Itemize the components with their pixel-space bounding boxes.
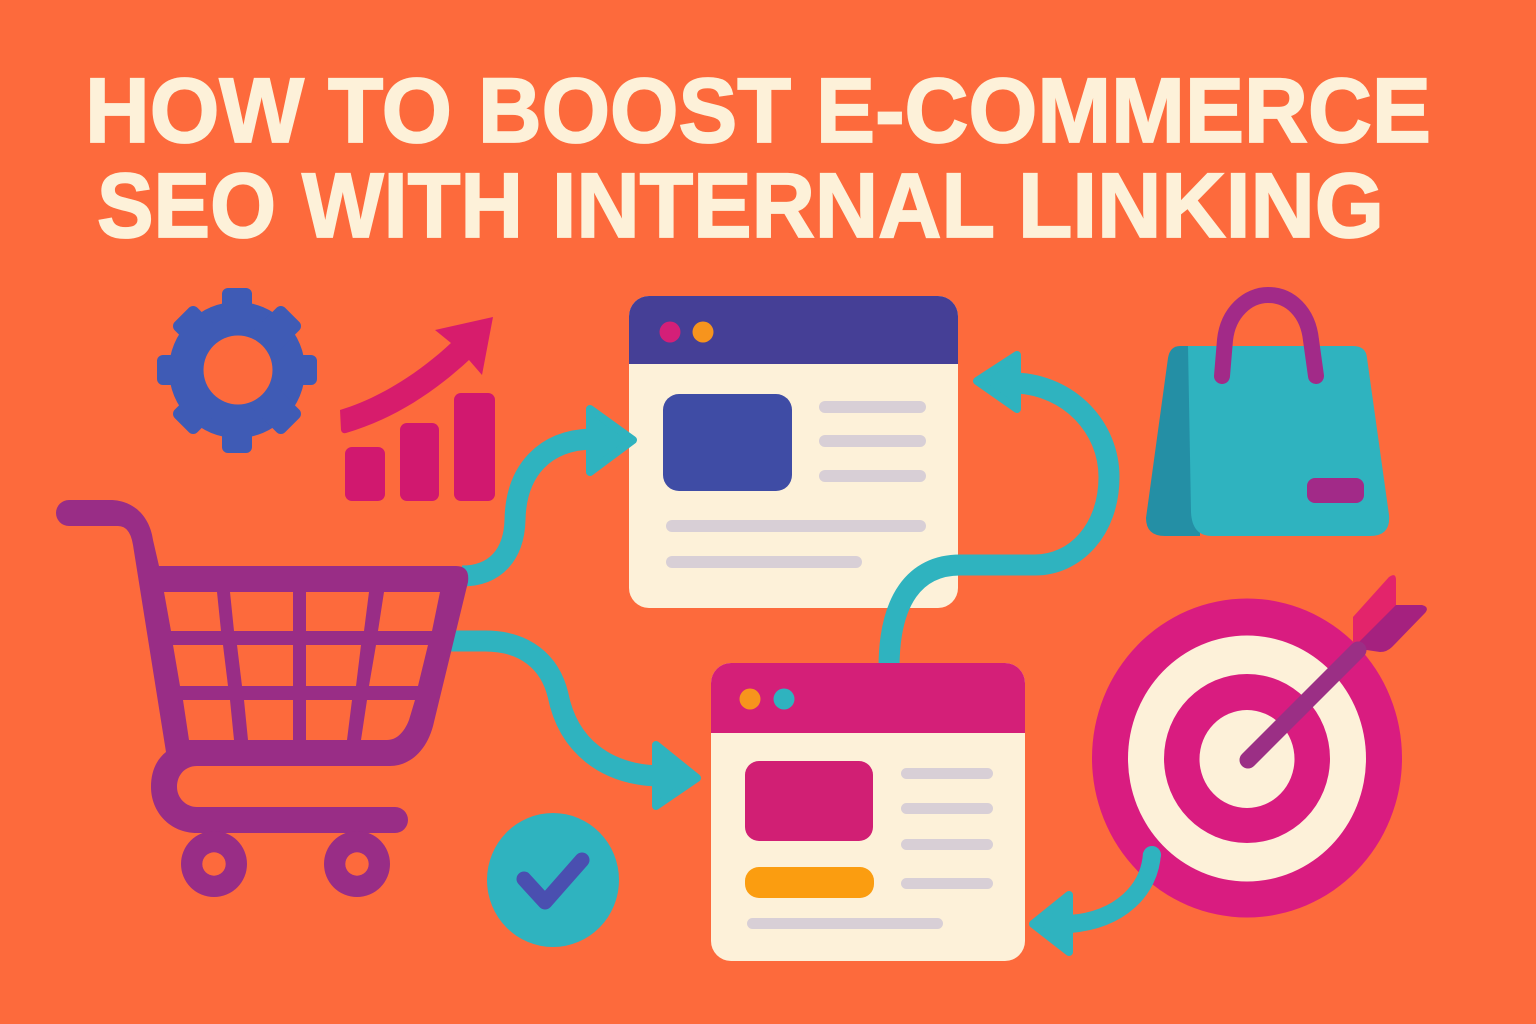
- arrow: bottom page to top page: [889, 355, 1109, 668]
- arrow: cart to bottom page: [450, 641, 697, 806]
- icon: check badge: [487, 813, 619, 947]
- cart frame: [56, 500, 468, 833]
- icon: gear: [157, 288, 317, 453]
- icon: shopping cart: [56, 500, 468, 897]
- title: E-COMMERCE: [816, 60, 1431, 162]
- title: LINKING: [1018, 155, 1384, 257]
- icon: shopping bag: [1146, 295, 1389, 536]
- title: SEO: [97, 155, 276, 257]
- arrow: target to bottom page: [1033, 846, 1161, 952]
- title: BOOST: [478, 60, 791, 162]
- panel: top web page: [629, 296, 958, 608]
- title: WITH: [302, 155, 523, 257]
- wheel holes: [202, 852, 369, 876]
- panel: bottom web page: [711, 663, 1025, 961]
- icon: target with dart: [1092, 575, 1427, 918]
- cart basket cells: [164, 592, 440, 740]
- arrow: cart to top page: [462, 409, 633, 576]
- title: TO: [328, 60, 452, 162]
- bars: [345, 393, 495, 501]
- title: INTERNAL: [552, 155, 995, 257]
- title: HOW: [85, 60, 304, 162]
- icon: growth chart: [340, 317, 495, 501]
- cart wheels: [181, 831, 390, 897]
- arrow rising: [340, 317, 493, 433]
- title: [85, 60, 1431, 257]
